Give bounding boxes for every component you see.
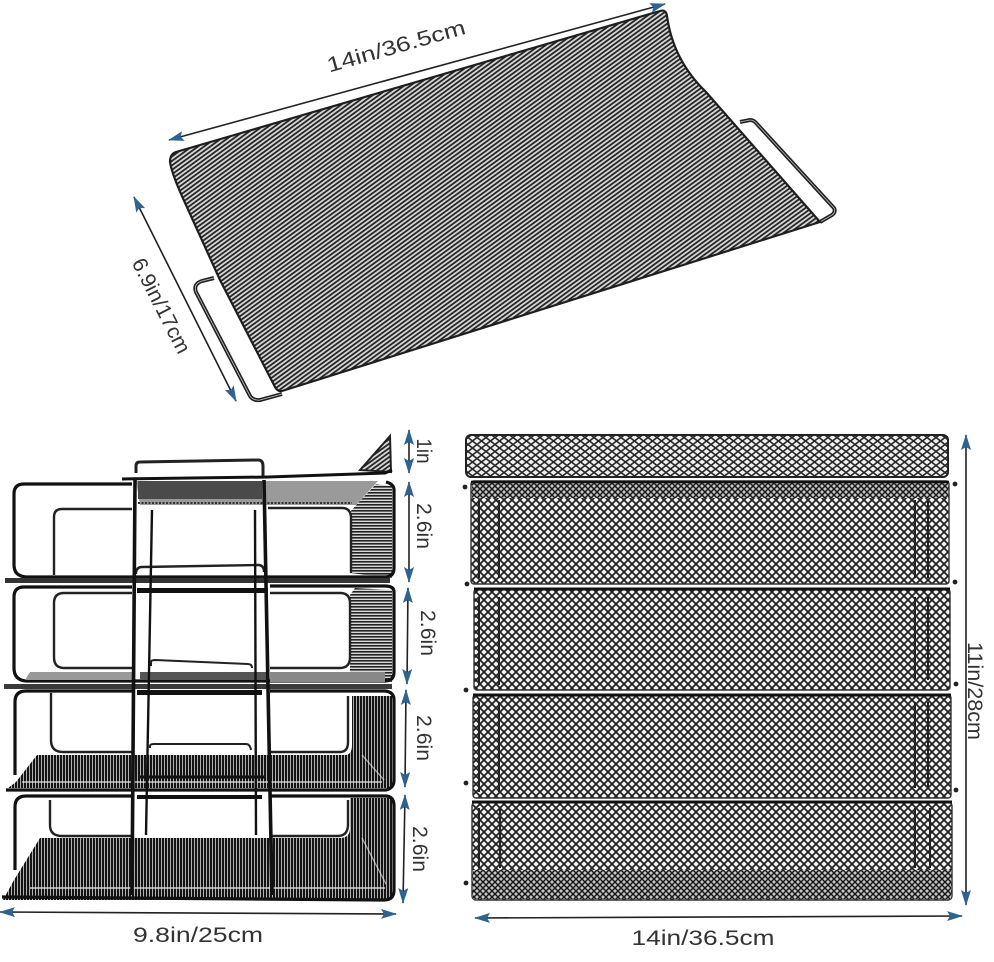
arrow: top shelf length (169, 4, 665, 140)
panel: stacked shelves front view (463, 435, 958, 900)
icon: shelf right handle (740, 120, 835, 222)
arrow: tier 2 height (407, 588, 408, 684)
arrow: front height (965, 435, 967, 905)
label: stack depth: 9.8in/25cm (133, 924, 263, 947)
label: tier 4 height: 2.6in (408, 826, 431, 872)
arrow: tier 3 height (405, 690, 406, 787)
shelf mesh surface (170, 11, 820, 391)
label: tier 1 height: 2.6in (412, 503, 435, 549)
label: top shelf width: 6.9in/17cm (127, 254, 195, 358)
tier 2 (4, 586, 394, 689)
icon: shelf left handle (195, 278, 282, 400)
label: tier 3 height: 2.6in (412, 715, 435, 761)
top lip mesh (466, 435, 948, 477)
panel: stacked shelves side view (2, 436, 394, 900)
label: lip height: 1in (412, 438, 435, 464)
tier 1 mesh (471, 481, 949, 584)
panel: single shelf top view (170, 11, 835, 400)
arrow: stack depth (0, 912, 396, 914)
label: front width: 14in/36.5cm (632, 927, 774, 950)
side fold lines (479, 500, 930, 868)
tier 4 (2, 795, 394, 900)
arrow: front width (475, 916, 962, 918)
icon: top lip of rack (122, 436, 392, 479)
label: top shelf length: 14in/36.5cm (324, 16, 468, 77)
tier 3 mesh (473, 695, 951, 798)
label: tier 2 height: 2.6in (416, 610, 439, 656)
arrow: tier 4 height (403, 795, 405, 903)
arrow: top shelf width (134, 197, 236, 401)
tier 3 (6, 690, 394, 790)
tier 4 mesh (472, 802, 952, 900)
icon: side hooks (463, 482, 958, 885)
label: front height: 11in/28cm (963, 642, 986, 740)
tier 2 mesh (474, 589, 950, 690)
tier 1 (5, 481, 394, 583)
arrow: lip height (408, 430, 410, 473)
arrow: tier 1 height (408, 482, 410, 582)
vertical rack uprights (132, 480, 272, 895)
